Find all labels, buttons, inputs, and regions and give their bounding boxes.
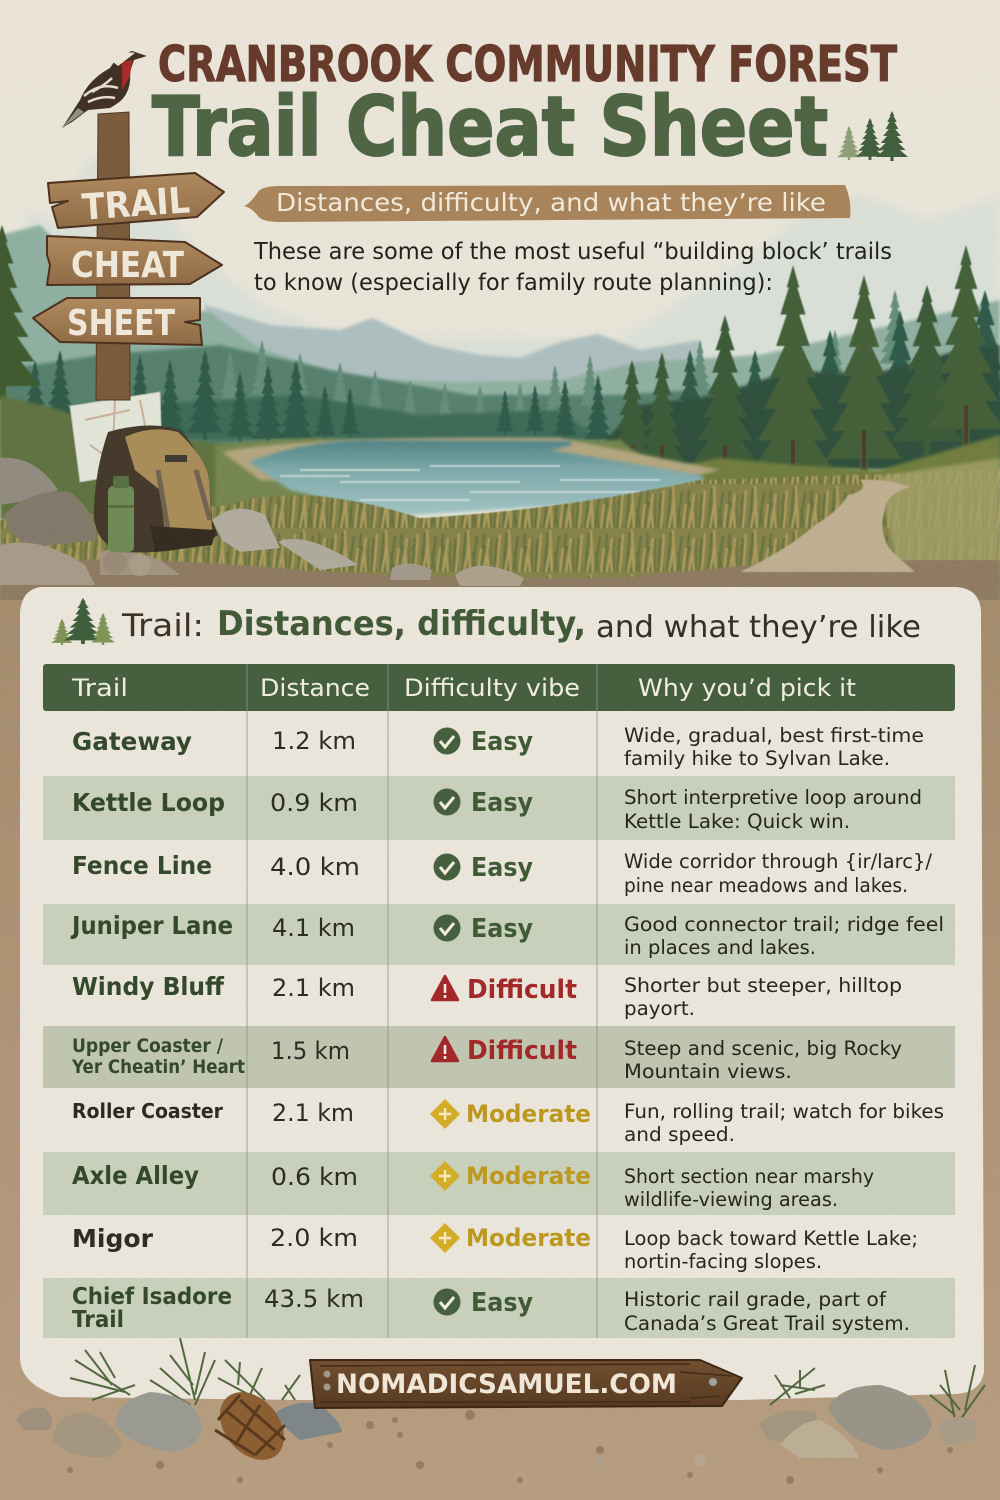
sign: sheet: SHEET bbox=[67, 303, 175, 344]
rocks and pinecone left bbox=[16, 1380, 342, 1472]
pine branches left bbox=[70, 1338, 300, 1405]
table header: Difficulty vibe bbox=[404, 674, 580, 702]
row: Roller Coaster: Roller Coaster bbox=[72, 1099, 223, 1123]
signpost bbox=[33, 112, 224, 400]
row: Migor: Moderate bbox=[466, 1224, 591, 1252]
scene: forest lake landscape bbox=[0, 0, 1000, 640]
intro text bbox=[253, 237, 892, 296]
table row backgrounds bbox=[43, 776, 955, 1338]
row: Roller Coaster bbox=[72, 1099, 944, 1146]
row: Gateway: 1.2 km bbox=[272, 727, 356, 755]
panel heading: Distances, difficulty, bbox=[217, 604, 586, 644]
paper grain overlay bbox=[0, 0, 1000, 560]
row: Windy Bluff: Difficult bbox=[467, 975, 577, 1005]
row: Kettle Loop bbox=[72, 786, 922, 833]
row: Fence Line: Easy bbox=[471, 853, 533, 883]
row: Kettle Loop: Easy bbox=[471, 788, 533, 818]
row: Chief Isadore Trail bbox=[72, 1284, 910, 1335]
row: Juniper Lane: in places and lakes. bbox=[624, 936, 816, 959]
row: Windy Bluff bbox=[72, 972, 902, 1020]
row: Juniper Lane bbox=[70, 911, 944, 959]
rocks along shore bbox=[0, 458, 524, 586]
row: Kettle Loop: Kettle Loop bbox=[72, 788, 225, 817]
row: Migor: Loop back toward Kettle Lake; bbox=[624, 1227, 918, 1250]
row: Juniper Lane: 4.1 km bbox=[272, 914, 355, 942]
intro text: to know (especially for family route planning): bbox=[254, 268, 773, 296]
row: Roller Coaster: Moderate bbox=[466, 1100, 591, 1128]
row: Upper Coaster / Yer Cheatin' Heart: Difficult bbox=[467, 1036, 577, 1066]
row: Fence Line: pine near meadows and lakes. bbox=[624, 874, 908, 897]
row: Windy Bluff: 2.1 km bbox=[272, 974, 355, 1002]
row: Gateway: family hike to Sylvan Lake. bbox=[624, 747, 890, 770]
row: Migor bbox=[72, 1223, 918, 1273]
table header: Trail bbox=[71, 674, 128, 702]
icon: small pine trees by title bbox=[837, 111, 908, 161]
row: Chief Isadore Trail: Historic rail grade, part of bbox=[624, 1288, 887, 1311]
row: Migor: nortin-facing slopes. bbox=[624, 1250, 822, 1273]
sign: sheet bbox=[33, 298, 202, 345]
title: Trail Cheat Sheet: Trail Cheat Sheet bbox=[152, 80, 828, 175]
row: Migor: Migor bbox=[72, 1224, 154, 1253]
sign: trail bbox=[48, 173, 224, 229]
panel heading: Trail: bbox=[121, 608, 204, 644]
row: Upper Coaster / Yer Cheatin' Heart: 1.5 km bbox=[271, 1037, 350, 1065]
dirt speckle bbox=[67, 1410, 953, 1484]
row: Juniper Lane: Juniper Lane bbox=[70, 911, 233, 940]
row: Chief Isadore Trail: 43.5 km bbox=[264, 1285, 364, 1313]
row: Chief Isadore Trail: Chief Isadore bbox=[72, 1284, 232, 1310]
row: Axle Alley: Axle Alley bbox=[72, 1161, 199, 1190]
rocks right bbox=[759, 1385, 976, 1458]
row: Chief Isadore Trail: Easy bbox=[471, 1288, 533, 1318]
signpost pole bbox=[96, 112, 130, 400]
row: Fence Line bbox=[72, 850, 932, 897]
table header bbox=[43, 664, 955, 711]
icon: water bottle bbox=[108, 476, 134, 552]
row: Upper Coaster / Yer Cheatin' Heart: Mountain views. bbox=[624, 1060, 792, 1083]
row: Chief Isadore Trail: Canada’s Great Trail system. bbox=[624, 1312, 910, 1335]
icon: trail map bbox=[70, 392, 162, 482]
icon: heading pine trees bbox=[51, 598, 115, 645]
row: Upper Coaster / Yer Cheatin' Heart: Steep and scenic, big Rocky bbox=[624, 1037, 902, 1060]
row: Windy Bluff: payort. bbox=[624, 997, 695, 1020]
row: Kettle Loop: Short interpretive loop around bbox=[624, 786, 922, 809]
dirt ground bbox=[0, 600, 1000, 1500]
row: Kettle Loop: 0.9 km bbox=[270, 789, 358, 817]
row: Migor: 2.0 km bbox=[270, 1224, 358, 1252]
row: Windy Bluff: Shorter but steeper, hilltop bbox=[624, 974, 902, 997]
row: Gateway: Easy bbox=[471, 727, 533, 757]
row: Windy Bluff: Windy Bluff bbox=[72, 972, 225, 1001]
intro text: These are some of the most useful “building block’ trails bbox=[253, 237, 892, 265]
table header: Distance bbox=[260, 674, 370, 702]
panel heading: and what they’re like bbox=[596, 610, 921, 645]
row: Roller Coaster: 2.1 km bbox=[272, 1099, 354, 1127]
wood sign: nomadicsamuel.com: NOMADICSAMUEL.COM bbox=[336, 1369, 677, 1400]
row: Fence Line: Wide corridor through {ir/larc}/ bbox=[624, 850, 932, 873]
row: Juniper Lane: Good connector trail; ridge feel bbox=[624, 913, 944, 936]
row: Roller Coaster: and speed. bbox=[624, 1123, 735, 1146]
row: Chief Isadore Trail: Trail bbox=[72, 1307, 124, 1333]
subtitle banner bbox=[244, 185, 850, 222]
subtitle text: Distances, difficulty, and what they’re like bbox=[276, 188, 826, 217]
row: Upper Coaster / Yer Cheatin' Heart: Yer Cheatin’ Heart bbox=[71, 1056, 245, 1078]
row: Upper Coaster / Yer Cheatin' Heart: Upper Coaster / bbox=[72, 1035, 223, 1057]
pine branches right bbox=[770, 1365, 985, 1420]
sign: trail: TRAIL bbox=[81, 180, 191, 229]
icon: woodpecker bbox=[62, 51, 147, 128]
row: Axle Alley: Moderate bbox=[466, 1162, 591, 1190]
row: Roller Coaster: Fun, rolling trail; watch for bikes bbox=[624, 1100, 944, 1123]
row: Gateway: Wide, gradual, best first-time bbox=[624, 724, 924, 747]
row: Gateway: Gateway bbox=[72, 727, 192, 756]
row: Juniper Lane: Easy bbox=[471, 914, 533, 944]
row: Gateway bbox=[72, 724, 924, 770]
row: Kettle Loop: Kettle Lake: Quick win. bbox=[624, 810, 850, 833]
icon: backpack bbox=[94, 425, 218, 552]
sign: cheat: CHEAT bbox=[71, 245, 184, 286]
row: Axle Alley bbox=[72, 1161, 874, 1211]
row: Upper Coaster / Yer Cheatin' Heart bbox=[71, 1035, 902, 1083]
row: Fence Line: Fence Line bbox=[72, 851, 212, 880]
row: Axle Alley: 0.6 km bbox=[271, 1163, 358, 1191]
wood sign: nomadicsamuel.com bbox=[310, 1360, 742, 1408]
panel heading bbox=[121, 604, 921, 645]
row: Axle Alley: Short section near marshy bbox=[624, 1165, 874, 1188]
row: Axle Alley: wildlife-viewing areas. bbox=[624, 1188, 838, 1211]
panel: trail table card bbox=[20, 587, 984, 1400]
table header: Why you’d pick it bbox=[638, 674, 856, 702]
sign: cheat bbox=[47, 236, 222, 286]
row: Fence Line: 4.0 km bbox=[270, 853, 360, 881]
